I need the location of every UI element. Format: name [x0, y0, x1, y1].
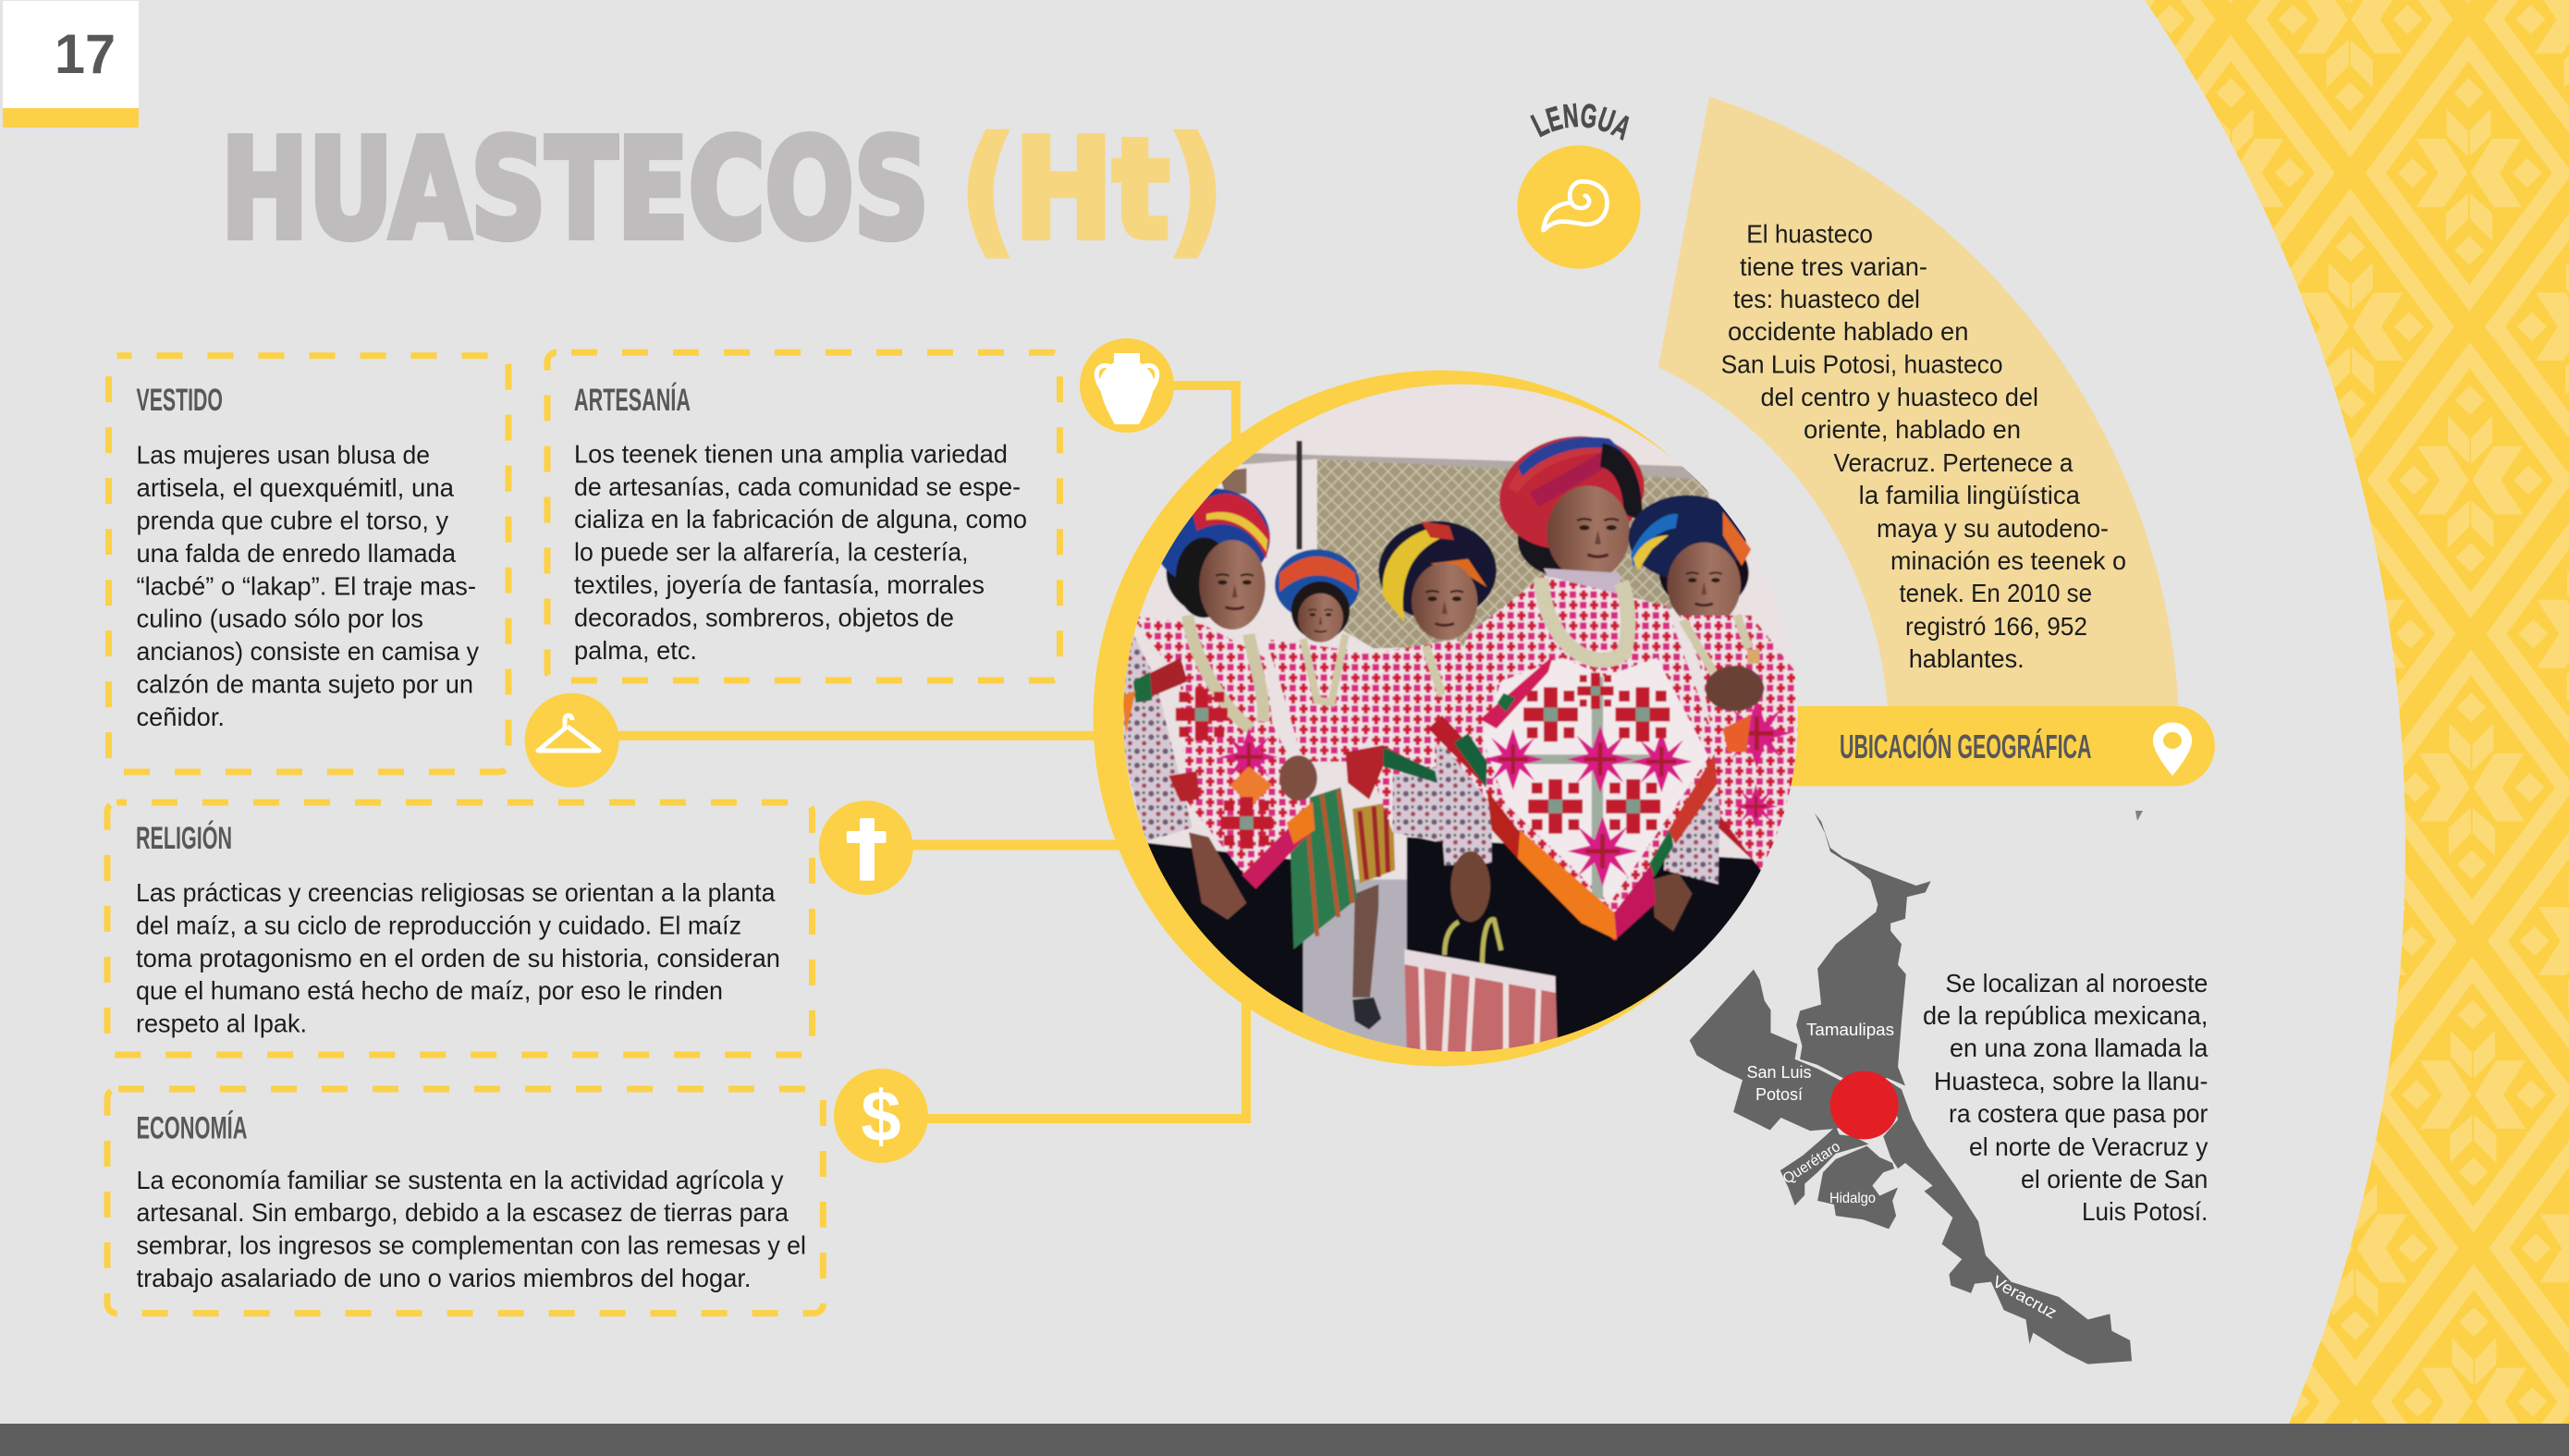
panel: vestido: VESTIDO [137, 383, 223, 418]
lengua text: tes: huasteco del [1733, 285, 1920, 313]
connectors [610, 385, 1246, 1119]
panel: economia [107, 1089, 823, 1314]
panel: vestido [109, 356, 508, 772]
lengua text [1721, 220, 2126, 673]
map labels: Hidalgo [1829, 1191, 1876, 1206]
decorative woven pattern band [2126, 0, 2569, 1424]
lengua text: Veracruz. Pertenece a [1834, 448, 2074, 477]
lengua fan panel [1658, 96, 2179, 712]
ubicacion text [1923, 969, 2208, 1226]
panel: artesania: ARTESANÍA [574, 383, 691, 418]
map labels: Tamaulipas [1806, 1021, 1894, 1039]
panel: vestido: ancianos) consiste en camisa y [137, 637, 479, 666]
icon: vase [1080, 338, 1174, 433]
panel: vestido: “lacbé” o “lakap”. El traje mas- [137, 571, 476, 600]
panel: economia: La economía familiar se sustenta en la actividad agrícola y [137, 1166, 784, 1194]
lengua text: del centro y huasteco del [1760, 383, 2038, 411]
lengua text: El huasteco [1746, 220, 1873, 249]
lengua text: occidente hablado en [1728, 317, 1969, 346]
map marker [1830, 1071, 1899, 1139]
title: HUASTECOS [221, 110, 929, 269]
panel: religion: toma protagonismo en el orden de su historia, consideran [136, 944, 780, 973]
icon: cross [819, 801, 913, 895]
footer bar [0, 1424, 2569, 1456]
icon: dollar [834, 1069, 928, 1163]
title: (Ht) [960, 110, 1223, 269]
lengua text: tenek. En 2010 se [1899, 579, 2092, 607]
panel: vestido: culino (usado sólo por los [137, 605, 423, 633]
panel: religion: RELIGIÓN [136, 821, 232, 856]
lengua heading and icon [1517, 104, 1641, 269]
map labels [1746, 1021, 2060, 1322]
map labels: San Luis [1746, 1063, 1812, 1082]
page number tab [3, 1, 139, 128]
panel: artesania: lo puede ser la alfarería, la cestería, [574, 538, 969, 566]
small map mark [2135, 811, 2143, 821]
ubicacion text: el norte de Veracruz y [1969, 1132, 2208, 1161]
panel: vestido: una falda de enredo llamada [137, 539, 457, 568]
panel: religion: del maíz, a su ciclo de reproducción y cuidado. El maíz [136, 912, 741, 939]
panel: artesania: de artesanías, cada comunidad se espe- [574, 472, 1021, 501]
panel: vestido: artisela, el quexquémitl, una [137, 473, 455, 502]
ubicacion text: Se localizan al noroeste [1945, 969, 2208, 997]
map labels: Potosí [1755, 1085, 1803, 1104]
lengua text: la familia lingüística [1859, 481, 2081, 509]
ubicacion text: ra costera que pasa por [1949, 1099, 2208, 1128]
ubicacion text: Luis Potosí. [2082, 1197, 2208, 1226]
panel: vestido: calzón de manta sujeto por un [137, 669, 473, 699]
ubicacion bar: UBICACIÓN GEOGRÁFICA [1840, 727, 2091, 765]
panel: artesania: Los teenek tienen una amplia variedad [574, 440, 1008, 468]
photo ring [1093, 370, 1790, 1067]
panel: artesania: decorados, sombreros, objetos de [574, 603, 954, 632]
panel: religion: respeto al Ipak. [136, 1009, 307, 1037]
map: la huasteca [1690, 814, 2132, 1364]
map labels: Querétaro [1780, 1139, 1843, 1187]
ubicacion text: Huasteca, sobre la llanu- [1934, 1067, 2208, 1095]
panel: religion: que el humano está hecho de maíz, por eso le rinden [136, 976, 723, 1005]
panel: economia: sembrar, los ingresos se complementan con las remesas y el [137, 1231, 806, 1259]
panel: economia: ECONOMÍA [137, 1111, 248, 1146]
panel: economia: artesanal. Sin embargo, debido a la escasez de tierras para [137, 1198, 789, 1227]
lengua heading and icon: LENGUA [1530, 104, 1629, 141]
panel: vestido: ceñidor. [137, 703, 225, 731]
icon: dollar: $ [861, 1075, 901, 1156]
ubicacion bar [1756, 706, 2215, 786]
panel: vestido: prenda que cubre el torso, y [137, 507, 448, 534]
map labels: Veracruz [1989, 1272, 2060, 1322]
icon: hanger [525, 693, 619, 788]
photo: women in traditional dress [1123, 385, 1798, 1052]
page number tab: 17 [55, 23, 116, 85]
panel: religion [107, 802, 812, 1055]
panel: religion: Las prácticas y creencias religiosas se orientan a la planta [136, 878, 776, 907]
lengua text: minación es teenek o [1890, 546, 2126, 575]
lengua text: oriente, hablado en [1804, 415, 2021, 444]
lengua text: hablantes. [1909, 644, 2025, 673]
ubicacion text: el oriente de San [2021, 1165, 2208, 1193]
lengua text: tiene tres varian- [1740, 252, 1927, 281]
lengua text: San Luis Potosi, huasteco [1721, 349, 2002, 379]
panel: economia: trabajo asalariado de uno o varios miembros del hogar. [137, 1264, 751, 1292]
panel: artesania: textiles, joyería de fantasía, morrales [574, 570, 985, 599]
ubicacion text: en una zona llamada la [1950, 1034, 2208, 1062]
lengua text: registró 166, 952 [1905, 612, 2087, 641]
panel: artesania [547, 352, 1059, 680]
panel: artesania: cializa en la fabricación de alguna, como [574, 505, 1027, 533]
panel: artesania: palma, etc. [574, 636, 697, 665]
panel: vestido: Las mujeres usan blusa de [137, 441, 430, 470]
lengua text: maya y su autodeno- [1877, 514, 2109, 543]
ubicacion text: de la república mexicana, [1923, 1001, 2208, 1030]
